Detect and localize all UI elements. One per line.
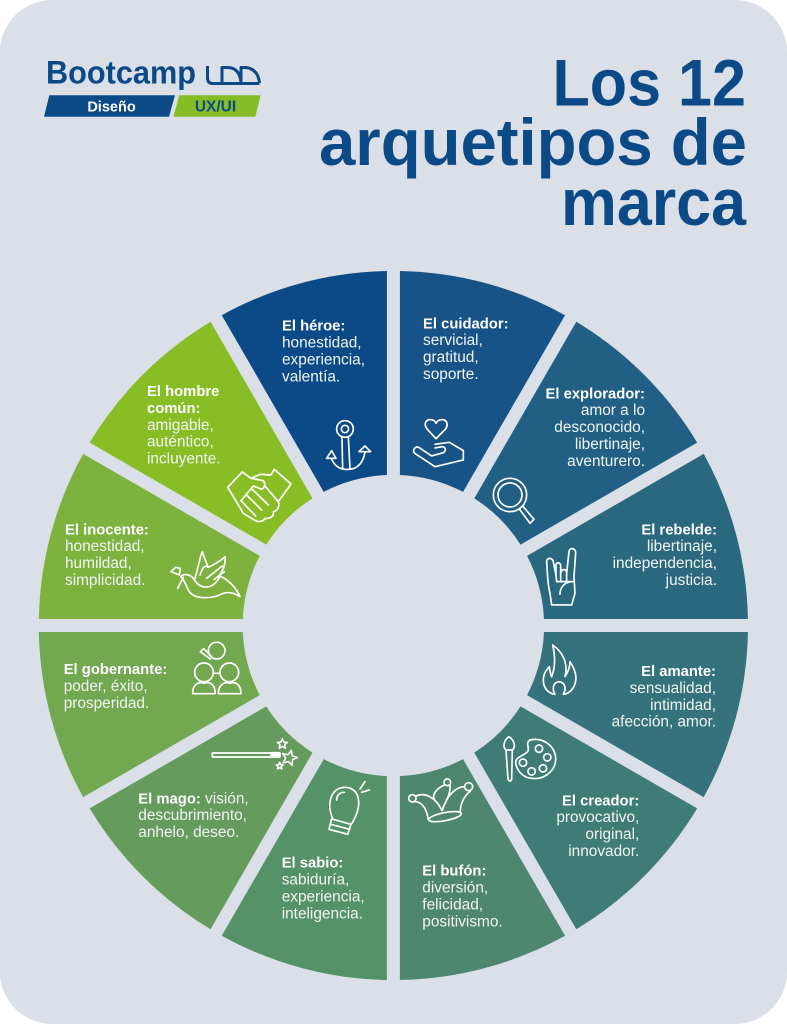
icon: jester hat <box>409 779 473 824</box>
text: El cuidador: El cuidador: <box>423 316 509 332</box>
text: El explorador: El explorador: <box>546 386 645 402</box>
text: El mago: descubrimiento, <box>138 807 247 824</box>
title <box>319 46 747 239</box>
text: El gobernante: El gobernante: <box>64 662 167 678</box>
text: El inocente: simplicidad. <box>65 572 145 589</box>
text: El hombre común: amigable, <box>147 417 214 434</box>
segment: El inocente <box>39 454 260 619</box>
logo wordmark: Bootcamp <box>46 54 196 90</box>
text: El mago: anhelo, deseo. <box>138 824 239 841</box>
text: El creador: original, <box>585 826 639 843</box>
text: El rebelde: justicia. <box>665 572 717 589</box>
icon: light bulb <box>329 782 369 834</box>
text: El mago: visión, <box>201 790 249 807</box>
title: Los 12 <box>552 46 746 120</box>
text: El héroe: honestidad, <box>282 335 362 352</box>
text: El explorador: amor a lo <box>581 402 645 419</box>
text: El rebelde: libertinaje, <box>647 538 717 555</box>
icon: rock hand <box>547 549 576 605</box>
banner: UX/UI: UX/UI <box>195 98 236 115</box>
icon: brush and palette <box>504 737 556 781</box>
text: El bufón: positivismo. <box>422 913 503 930</box>
text: El explorador: aventurero. <box>567 453 645 470</box>
text: El hombre común: común: <box>147 401 200 417</box>
text: El rebelde: El rebelde: <box>641 522 717 538</box>
text: El cuidador: servicial, <box>423 332 483 349</box>
segment: El explorador <box>466 322 719 596</box>
segment: El rebelde <box>512 454 786 707</box>
icon: dove with branch <box>171 552 240 598</box>
icon: handshake <box>228 469 291 522</box>
segment: El creador <box>423 698 697 951</box>
text: El sabio: El sabio: <box>282 856 343 872</box>
logo: Bootcamp UDD Diseño UX/UI <box>44 54 261 117</box>
archetype wheel <box>1 233 786 1018</box>
icon: magic wand <box>212 739 299 769</box>
icon: UDD mark <box>208 66 260 84</box>
text: El gobernante: poder, éxito, <box>64 678 148 695</box>
text: El sabio: sabiduría, <box>282 872 349 889</box>
text: El héroe: experiencia, <box>282 352 365 368</box>
text: El inocente: honestidad, <box>65 538 145 555</box>
text: El hombre común: auténtico, <box>147 434 214 451</box>
segment: El héroe <box>222 233 475 507</box>
text: El creador: provocativo, <box>556 809 639 826</box>
icon: magnifying glass <box>493 478 534 523</box>
text: El amante: sensualidad, <box>630 680 716 697</box>
text: El creador: innovador. <box>568 843 639 860</box>
segment: El cuidador <box>400 271 565 492</box>
segment: El hombre común <box>90 300 363 553</box>
banner: UX/UI <box>173 95 261 117</box>
text: El explorador: desconocido, <box>554 419 645 436</box>
segment: El bufón <box>312 744 565 1018</box>
title: arquetipos de <box>319 105 747 179</box>
text: El rebelde: independencia, <box>613 555 717 572</box>
text: El amante: El amante: <box>641 664 716 680</box>
text: El creador: El creador: <box>562 793 639 809</box>
text: El hombre común: El hombre <box>147 384 219 400</box>
text: El gobernante: prosperidad. <box>64 695 149 712</box>
text: El inocente: humildad, <box>65 555 132 572</box>
banner: Diseño <box>44 95 175 117</box>
text: El bufón: diversión, <box>422 880 488 897</box>
text: El mago: El mago: <box>138 791 201 807</box>
icon: flame <box>543 645 576 694</box>
text: El héroe: valentía. <box>282 368 340 385</box>
text: El sabio: experiencia, <box>282 888 365 906</box>
text: El cuidador: soporte. <box>423 366 479 383</box>
segment: El gobernante <box>1 544 274 797</box>
title: marca <box>561 165 747 239</box>
text: El explorador: libertinaje, <box>575 436 645 453</box>
segment: El sabio <box>222 759 387 980</box>
icon: anchor <box>327 421 371 469</box>
banner: Diseño: Diseño <box>87 99 136 115</box>
text: El bufón: felicidad, <box>422 896 483 914</box>
text: El amante: intimidad, <box>650 697 716 714</box>
text: El hombre común: incluyente. <box>147 451 221 468</box>
text: El sabio: inteligencia. <box>282 905 363 922</box>
text: El bufón: El bufón: <box>422 864 486 880</box>
text: El amante: afección, amor. <box>612 714 716 731</box>
text: El héroe: El héroe: <box>282 319 345 335</box>
icon: ruler group <box>193 642 241 694</box>
segment: El amante <box>527 632 748 797</box>
segment: El mago <box>67 655 321 929</box>
text: El cuidador: gratitud, <box>423 349 479 366</box>
text: El inocente: El inocente: <box>65 522 149 538</box>
icon: heart in hand <box>414 420 463 467</box>
